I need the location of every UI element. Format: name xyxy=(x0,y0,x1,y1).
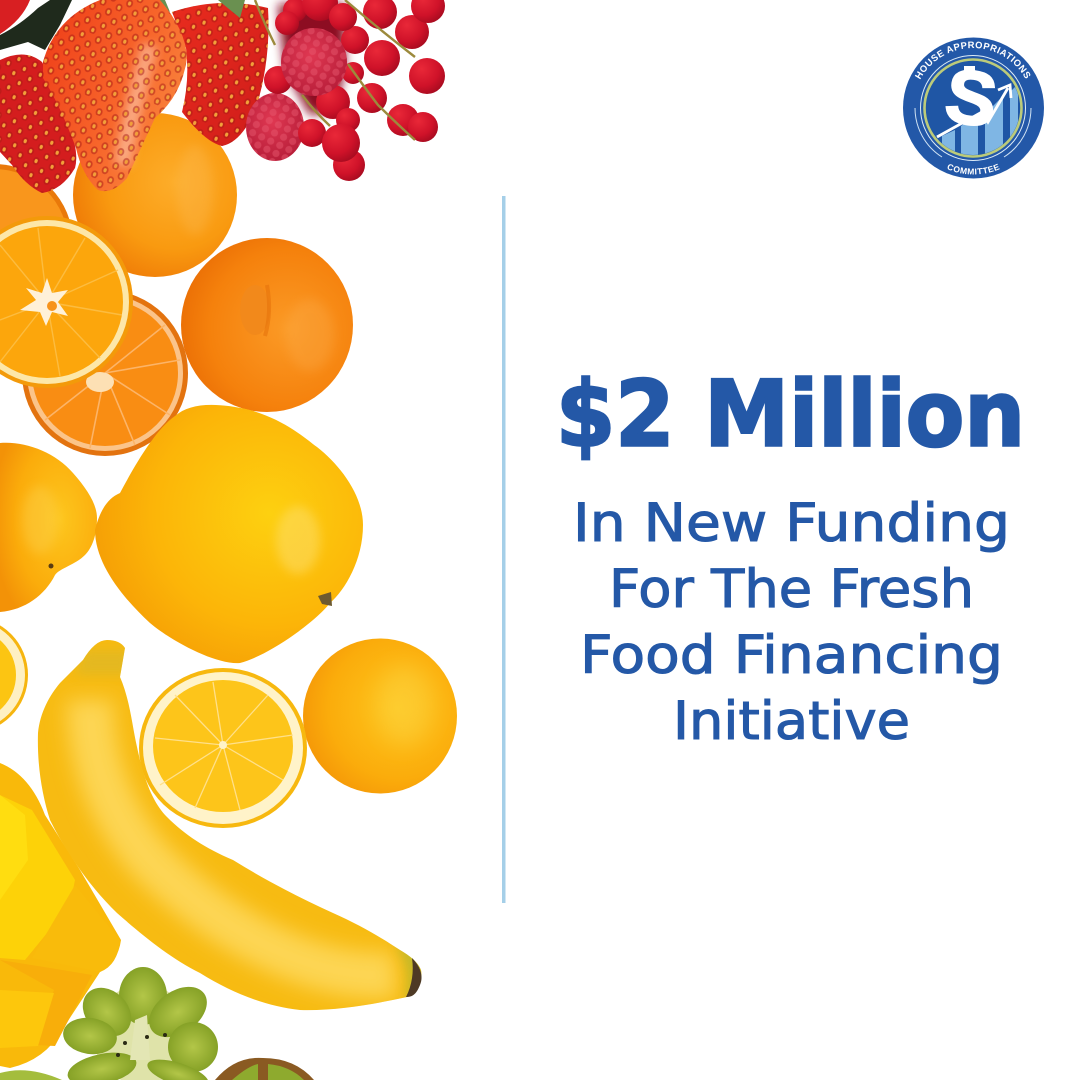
fruit: whole tangerine with navel xyxy=(181,238,353,412)
fruit: kiwi xyxy=(61,967,222,1080)
logo: growth arrow xyxy=(937,85,1011,137)
fruit: whole tangerine top xyxy=(73,113,237,277)
logo: rising bars xyxy=(942,87,1018,155)
fruit: raspberry top xyxy=(281,28,347,96)
fruit: left lemon slice xyxy=(0,617,28,733)
logo: dollar sign: S xyxy=(940,53,1002,144)
fruit: upper orange slice xyxy=(0,216,133,388)
panel: fruit collage xyxy=(0,0,457,1080)
fruit: bottom kiwi halves xyxy=(0,1058,314,1080)
fruit: yellow orange right xyxy=(303,638,457,794)
fruit: right strawberry xyxy=(172,3,268,146)
fruit: banana xyxy=(38,640,425,1010)
fruit: top-left orange slice piece xyxy=(0,164,73,322)
text block: funding description xyxy=(573,493,1010,752)
text block: funding description: Initiative xyxy=(673,691,910,752)
logo: arc lettering: HOUSE APPROPRIATIONS xyxy=(914,42,1030,80)
fruit: top-left dark leaves and strawberry xyxy=(0,0,245,50)
fruit: currant stems xyxy=(255,0,415,140)
fruit: berry shadow xyxy=(278,4,345,115)
logo: committee lettering: COMMITTEE xyxy=(948,164,1000,174)
text block: funding description: Food Financing xyxy=(580,625,1003,686)
fruit: left strawberry xyxy=(0,54,76,193)
fruit: red currants xyxy=(264,0,445,181)
divider line xyxy=(502,196,506,903)
fruit: big orange strawberry xyxy=(43,0,187,191)
logo: House Appropriations Committee seal xyxy=(903,38,1044,178)
heading: amount: $2 Million xyxy=(556,362,1025,468)
fruit: lower raspberry xyxy=(246,93,304,161)
fruit: lower tangerine slice xyxy=(22,290,188,456)
text block: funding description: In New Funding xyxy=(573,493,1010,554)
text block: funding description: For The Fresh xyxy=(609,559,974,620)
fruit: left yellow orange xyxy=(0,443,97,612)
fruit: mango xyxy=(0,763,121,1068)
fruit: large yellow apple xyxy=(95,405,363,663)
fruit: lemon slice centre xyxy=(139,668,307,828)
